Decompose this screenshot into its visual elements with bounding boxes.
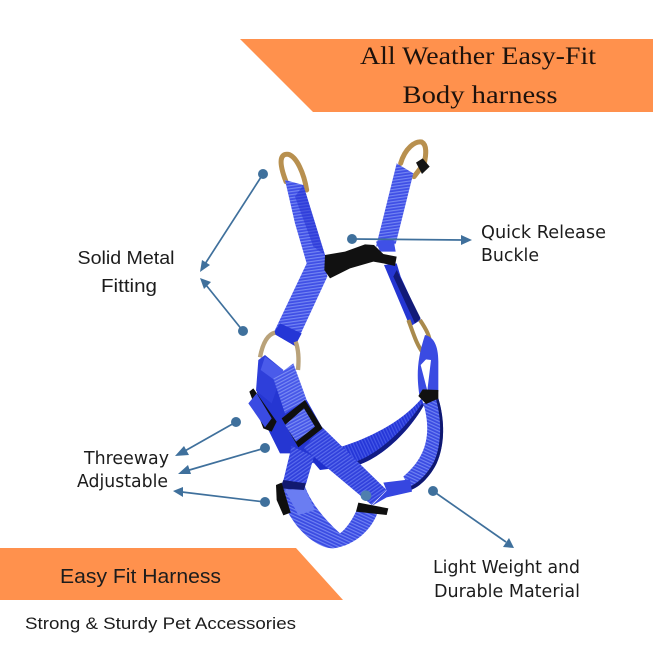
label: Light Weight and Durable Material: Durable Material [434,582,580,602]
harness product image [248,142,443,548]
callout: threeway adjustable [77,417,270,507]
banner text: Easy Fit Harness [60,566,221,588]
callout: solid metal fitting [78,169,268,336]
upper right strap [376,163,413,247]
arrow: upper ring [200,169,268,272]
label: Threeway Adjustable [77,449,169,492]
slider [372,479,412,506]
label: Quick Release Buckle: Quick Release [481,223,606,243]
right lower ring [408,320,430,353]
thin right strap [384,263,421,327]
strap wrap [283,446,314,484]
label: Threeway Adjustable: Adjustable [77,472,168,492]
label: Light Weight and Durable Material: Light Weight and [433,558,580,578]
title: All Weather Easy-Fit [360,43,596,70]
dot on harness [361,490,371,501]
label: Solid Metal Fitting: Solid Metal [78,247,174,268]
right small loop [418,335,438,395]
arrow: material [428,486,514,548]
top banner [240,39,653,112]
arrow: buckle [347,234,472,245]
thin crossing strap [342,398,424,465]
label: Solid Metal Fitting: Fitting [101,275,157,296]
label: Quick Release Buckle: Buckle [481,246,539,266]
centre buckle [282,400,323,447]
callout: quick release buckle [347,223,606,266]
bottom banner [0,548,343,600]
bottom clips [276,483,291,515]
arrow: lower adjuster [173,487,270,507]
tagline: Strong & Sturdy Pet Accessories [25,614,296,633]
icon: top metal rings [281,142,426,190]
back strap [257,378,322,463]
label: Light Weight and Durable Material [433,558,580,602]
label: Threeway Adjustable: Threeway [83,449,169,469]
callout: light weight and durable material [428,486,580,602]
big diagonal strap [304,427,387,505]
label: Solid Metal Fitting [78,247,174,296]
arrow: upper adjuster [175,417,241,456]
arrow: lower ring [200,278,248,336]
upper left strap [273,180,327,346]
lower harness [248,320,443,548]
bottom loop [280,487,377,548]
left lower ring [260,333,299,370]
label: Quick Release Buckle [481,223,606,266]
folded strap pieces [256,355,283,403]
title: Body harness [402,82,558,109]
title [360,43,596,109]
upper harness [273,142,430,346]
right large loop [403,398,443,490]
arrow: middle adjuster [178,443,270,474]
buckle [324,244,397,278]
left clip [249,388,277,432]
icon: ring clip [416,158,430,174]
